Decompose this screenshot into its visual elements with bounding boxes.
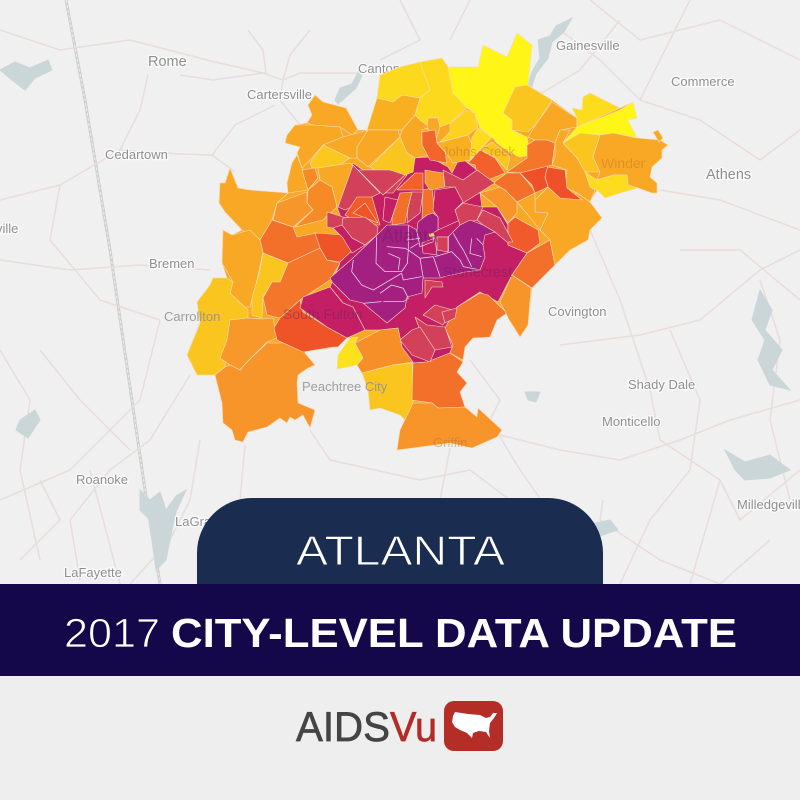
label: Carrollton: Carrollton	[164, 309, 220, 324]
label: Gainesville: Gainesville	[556, 38, 620, 53]
footer background	[0, 676, 800, 800]
label: Griffin: Griffin	[433, 435, 467, 450]
city name tab	[197, 498, 603, 584]
city labels on basemap	[0, 38, 800, 580]
label: LaFayette: LaFayette	[64, 565, 122, 580]
label: South Fulton: South Fulton	[283, 306, 362, 322]
heading: ATLANTA: ATLANTA	[296, 527, 505, 574]
basemap background	[0, 0, 800, 600]
label: Atlanta: Atlanta	[382, 226, 439, 246]
wordmark: Vu: Vu	[390, 703, 437, 750]
faint place names on map	[164, 144, 646, 450]
title band	[0, 584, 800, 676]
label: Johns Creek: Johns Creek	[442, 144, 515, 159]
label: Cedartown: Cedartown	[105, 147, 168, 162]
label: Monticello: Monticello	[602, 414, 661, 429]
seam lines inside central purple area	[352, 225, 483, 303]
label: Roanoke: Roanoke	[76, 472, 128, 487]
label: Bremen: Bremen	[149, 256, 195, 271]
choropleth map of Atlanta	[164, 33, 668, 450]
label: Peachtree City: Peachtree City	[302, 379, 388, 394]
label: Canton: Canton	[358, 61, 400, 76]
label: Winder: Winder	[601, 155, 646, 171]
wordmark: AIDS: AIDS	[296, 703, 390, 750]
label: Covington: Covington	[548, 304, 607, 319]
logo: AIDSVu	[296, 701, 503, 751]
title: 2017: 2017	[64, 610, 160, 656]
label: LaGrange: LaGrange	[175, 514, 233, 529]
label: Stonecrest: Stonecrest	[443, 265, 512, 281]
icon: US map in red rounded square	[444, 701, 503, 751]
logo wordmark	[296, 703, 437, 750]
label: Commerce: Commerce	[671, 74, 735, 89]
title: City-Level Data Update: CITY-LEVEL DATA UPDATE	[171, 610, 737, 656]
label: Shady Dale: Shady Dale	[628, 377, 695, 392]
label: Athens: Athens	[706, 167, 751, 183]
label: Cartersville: Cartersville	[247, 87, 312, 102]
label: Rome: Rome	[148, 54, 187, 70]
